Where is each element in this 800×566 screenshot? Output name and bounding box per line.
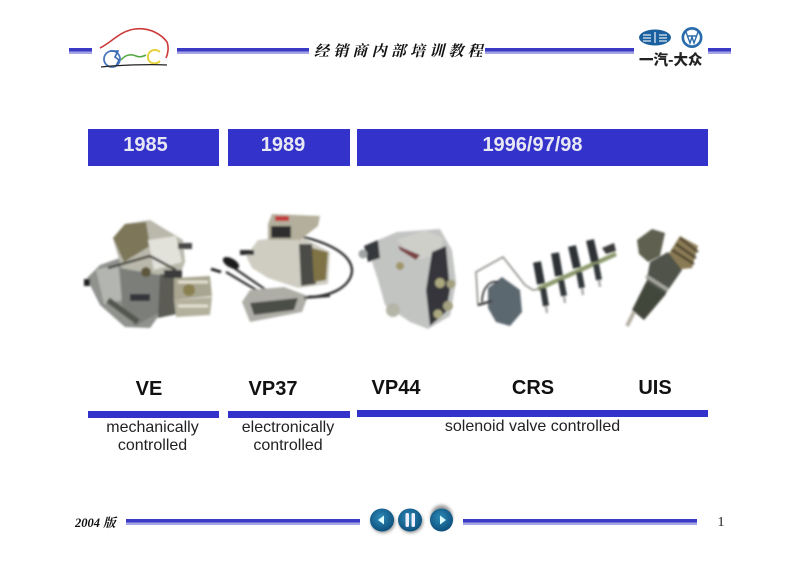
footer rule right [463,519,697,525]
label CRS: CRS [512,377,554,399]
footer rule left [126,519,360,525]
title: 经销商内部培训教程 [314,40,487,61]
year bar 1985: 1985 [123,134,168,156]
footer edition label: 2004 版 [75,516,116,530]
year bar 1985 [88,129,219,166]
text: solenoid valve controlled: solenoid valve controlled [445,418,620,434]
text: mechanically controlled: mechanically [106,418,199,436]
icon: FAW and VW logos [639,27,702,48]
label VE: VE [136,378,162,400]
underline bar VE [88,411,219,418]
image: common rail system [474,238,618,328]
image: unit injector [624,228,700,328]
year bar 1996/97/98 [357,129,708,166]
text: mechanically controlled: controlled [118,436,187,454]
text: electronically controlled [242,418,334,454]
FAW-VW brand wordmark: 一汽-大众 [639,49,703,70]
image: VP44 pump [357,228,457,330]
page number: 1 [718,515,724,530]
text: mechanically controlled [106,418,199,454]
underline bar VP37 [228,411,350,418]
year bar 1996/97/98: 1996/97/98 [482,134,583,156]
header rule mid-right [485,48,634,54]
year bar 1989 [228,129,350,166]
header rule right [708,48,731,54]
icon: navigation buttons [369,503,454,535]
underline bar VP44 CRS UIS [357,410,708,417]
label UIS: UIS [638,377,672,399]
header rule left [69,48,92,54]
image: VE pump [82,219,214,330]
text: electronically controlled: electronically [242,418,334,436]
icon: 3C car logo [100,28,169,68]
label VP44: VP44 [372,377,420,399]
image: VP37 pump and control unit [209,212,355,323]
text: electronically controlled: controlled [253,436,323,454]
year bar 1989: 1989 [261,134,305,156]
label VP37: VP37 [249,378,297,400]
header rule mid-left [177,48,309,54]
